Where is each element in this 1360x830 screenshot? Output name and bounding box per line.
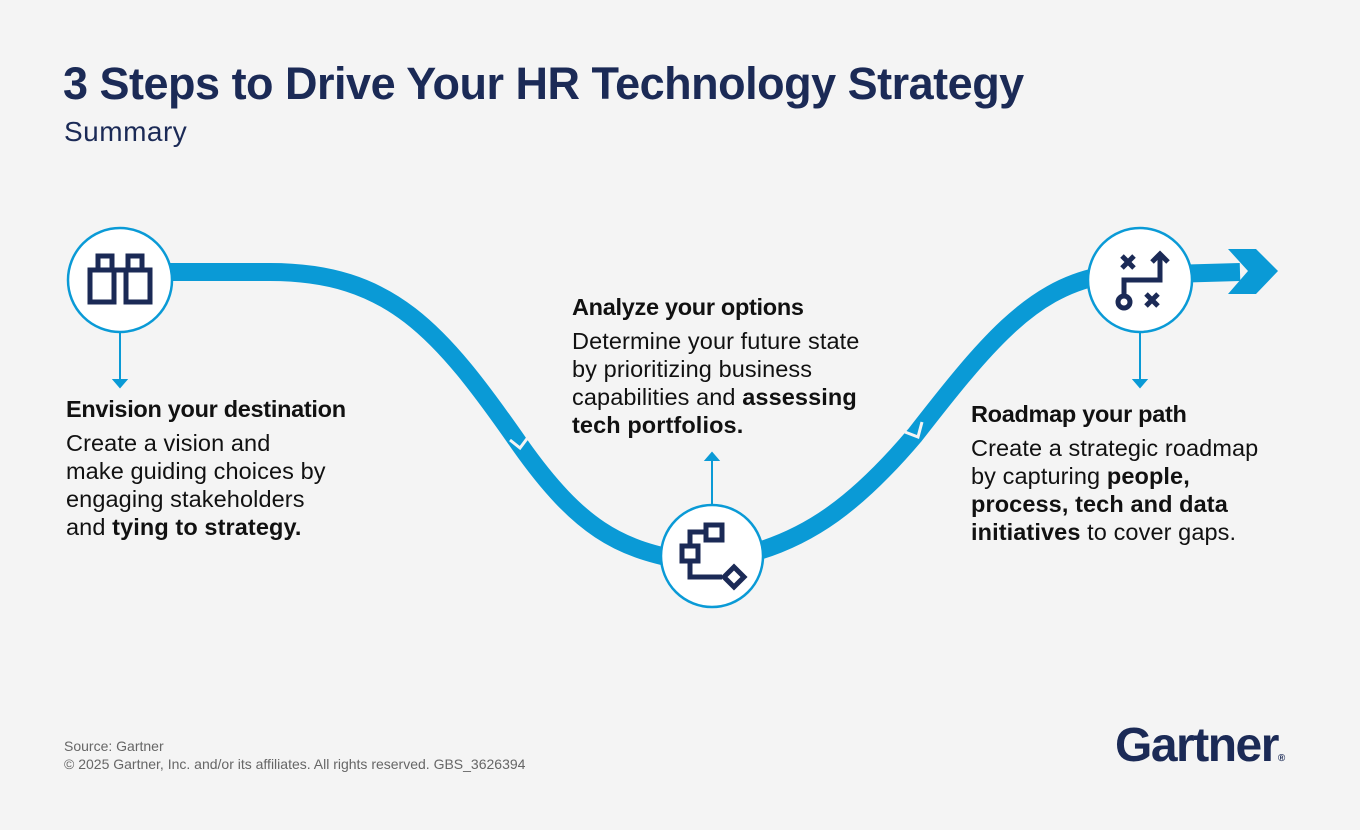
icon: flowchart	[661, 505, 763, 607]
text: roadmap: process, tech and data	[971, 491, 1228, 517]
text: analyze: tech portfolios.	[572, 412, 743, 438]
subtitle: Summary	[64, 116, 187, 147]
logo: Gartner®	[1115, 719, 1284, 772]
road path	[165, 272, 1240, 560]
text: envision: Create a vision and	[66, 430, 270, 456]
footer source: Source: Gartner	[64, 738, 164, 754]
text: analyze: by prioritizing business	[572, 356, 812, 382]
text: envision: make guiding choices by	[66, 458, 326, 484]
connector arrows	[114, 332, 1146, 505]
chevrons on path	[510, 422, 922, 448]
text: analyze: Analyze your options	[572, 294, 804, 320]
title: 3 Steps to Drive Your HR Technology Strategy	[63, 58, 1024, 109]
text: roadmap: initiatives to cover gaps.	[971, 519, 1236, 545]
text: roadmap	[971, 401, 1258, 545]
icon: binoculars	[68, 228, 172, 332]
text: roadmap: Create a strategic roadmap	[971, 435, 1258, 461]
arrow head	[1228, 249, 1278, 294]
footer source: © 2025 Gartner, Inc. and/or its affiliates. All rights reserved. GBS_3626394	[64, 756, 525, 772]
footer source	[64, 738, 525, 772]
icon: roadmap	[1088, 228, 1192, 332]
text: envision: engaging stakeholders	[66, 486, 305, 512]
text: roadmap: Roadmap your path	[971, 401, 1187, 427]
text: envision	[66, 396, 346, 540]
text: analyze	[572, 294, 859, 438]
text: analyze: Determine your future state	[572, 328, 859, 354]
text: envision: and tying to strategy.	[66, 514, 302, 540]
text: roadmap: by capturing people,	[971, 463, 1190, 489]
text: envision: Envision your destination	[66, 396, 346, 422]
text: analyze: capabilities and assessing	[572, 384, 857, 410]
